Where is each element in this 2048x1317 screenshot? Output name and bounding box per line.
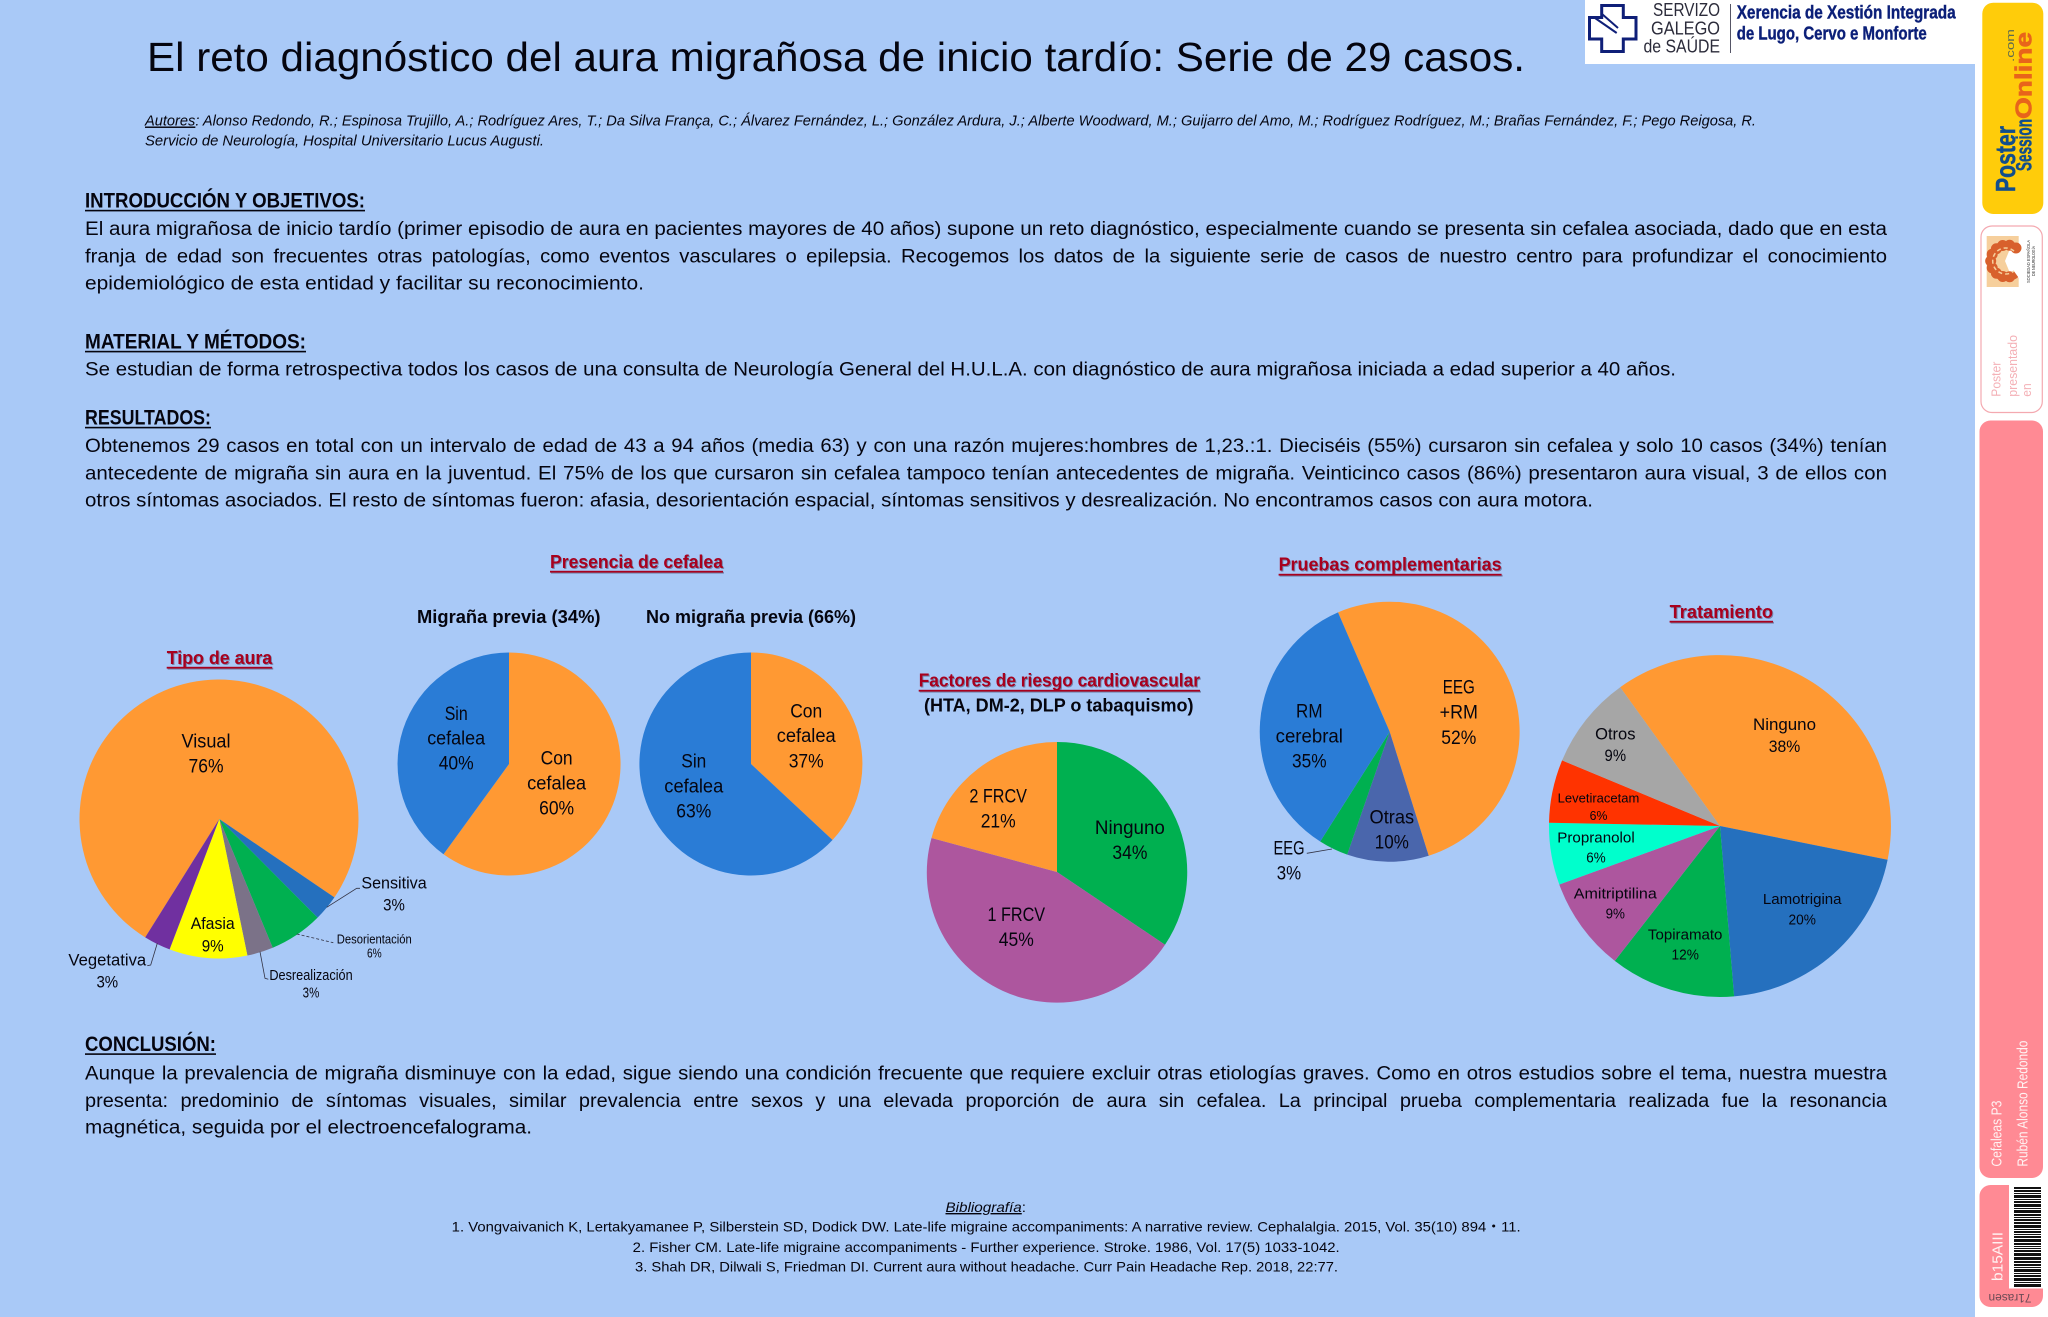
text block: magnética, seguida por el electroencefalograma. bbox=[85, 1118, 532, 1138]
organisation name: de Lugo, Cervo e Monforte bbox=[1737, 24, 1927, 44]
text block bbox=[85, 219, 1887, 294]
presented text: en bbox=[2019, 383, 2034, 397]
labels: 40% bbox=[439, 754, 474, 775]
labels: Afasia bbox=[191, 915, 235, 933]
labels: cerebral bbox=[1276, 727, 1343, 748]
panel: poster presentado en bbox=[1981, 226, 2042, 412]
labels: 60% bbox=[539, 798, 574, 819]
subheading: No migraña previa (66%) bbox=[646, 606, 856, 627]
labels: RM bbox=[1296, 702, 1323, 723]
labels: 2 FRCV bbox=[969, 786, 1027, 807]
labels: +RM bbox=[1440, 703, 1478, 724]
labels: Con bbox=[790, 701, 822, 722]
labels: 6% bbox=[367, 947, 382, 961]
organisation name: Xerencia de Xestión Integrada bbox=[1737, 2, 1957, 22]
labels: Ninguno bbox=[1753, 716, 1816, 734]
labels: 3% bbox=[303, 986, 319, 1002]
bibliography: 3. Shah DR, Dilwali S, Friedman DI. Current aura without headache. Curr Pain Headache Rep. 2018, 22:77. bbox=[635, 1259, 1338, 1275]
leader line bbox=[1307, 849, 1332, 853]
labels: 10% bbox=[1375, 832, 1409, 853]
text block: antecedente de migraña sin aura en la juventud. El 75% de los que cursaron sin cefalea tampoco tenían antecedentes de migraña. Veinticinco casos (86%) presentaron aura visual, 3 de ellos con bbox=[85, 464, 1887, 484]
chart heading: presencia de cefalea: Presencia de cefalea bbox=[550, 552, 724, 572]
panel: session tag: Cefaleas P3 bbox=[1989, 1101, 2006, 1167]
labels: Sin bbox=[445, 704, 468, 725]
labels: 3% bbox=[383, 897, 405, 915]
labels bbox=[427, 704, 587, 819]
pie bbox=[1260, 602, 1520, 862]
logo word Online: Online bbox=[2010, 32, 2036, 119]
logo: brain bbox=[1987, 236, 2019, 287]
labels: 38% bbox=[1769, 738, 1801, 756]
section: material y métodos bbox=[85, 330, 1676, 380]
logo wordmark bbox=[1644, 0, 1720, 56]
labels: 21% bbox=[981, 811, 1016, 832]
labels: Sin bbox=[681, 751, 706, 772]
labels: 35% bbox=[1292, 752, 1327, 773]
logo wordmark: de SAÚDE bbox=[1644, 36, 1720, 56]
labels: 20% bbox=[1788, 912, 1816, 928]
bibliography: Bibliografía : bbox=[946, 1199, 1026, 1215]
section: resultados bbox=[85, 406, 1887, 512]
icon: cross bbox=[1590, 6, 1636, 52]
logo word Session: Session bbox=[2012, 119, 2036, 171]
labels: 3% bbox=[96, 974, 118, 992]
logo suffix: .com bbox=[2005, 29, 2017, 62]
labels: cefalea bbox=[427, 728, 486, 749]
pie bbox=[639, 652, 862, 875]
chart: migraña previa bbox=[398, 606, 621, 876]
pie bbox=[398, 652, 621, 876]
chart: no migraña previa bbox=[639, 606, 862, 875]
labels: 63% bbox=[676, 801, 711, 822]
labels: Vegetativa bbox=[68, 952, 147, 970]
section: introducción y objetivos bbox=[85, 188, 1887, 294]
presented text: presentado bbox=[2005, 335, 2020, 397]
title: El reto diagnóstico del aura migrañosa de inicio tardío: Serie de 29 casos. bbox=[147, 34, 1525, 80]
icon: cross diagonal strokes bbox=[1595, 14, 1618, 33]
heading: RESULTADOS: bbox=[85, 406, 211, 430]
barcode id: b15AIII bbox=[1990, 1232, 2007, 1281]
text block: otros síntomas asociados. El resto de síntomas fueron: afasia, desorientación espacial, síntomas sensitivos y desrealización. No encontramos casos con aura motora. bbox=[85, 490, 1593, 512]
authors: Autores: Alonso Redondo, R.; Espinosa Trujillo, A.; Rodríguez Ares, T.; Da Silva França, C.; Álvarez Fernández, L.; González Ardura, J.; Alberte Woodward, M.; Guijarro del Amo, M.; Rodríguez Rodríguez, M.; Brañas Fernández, F.; Pego Reigosa, R. bbox=[144, 112, 1756, 130]
subheading: (HTA, DM-2, DLP o tabaquismo) bbox=[924, 695, 1194, 716]
bibliography: 2. Fisher CM. Late-life migraine accompaniments - Further experience. Stroke. 1986, Vol. 17(5) 1033-1042. bbox=[633, 1239, 1340, 1255]
logo: PosterSessionOnline bbox=[1982, 3, 2043, 214]
panel: session tag bbox=[1980, 420, 2043, 1178]
labels: Con bbox=[541, 748, 573, 769]
labels: 1 FRCV bbox=[988, 905, 1045, 926]
barcode code: 71rasen bbox=[1988, 1291, 2032, 1305]
labels: EEG bbox=[1274, 838, 1304, 859]
labels: 9% bbox=[202, 938, 224, 956]
labels: Amitriptilina bbox=[1574, 886, 1658, 902]
society caption bbox=[2025, 239, 2037, 283]
labels: 12% bbox=[1672, 947, 1699, 963]
barcode bbox=[2014, 1187, 2041, 1288]
labels: 9% bbox=[1605, 747, 1626, 765]
labels: 6% bbox=[1586, 850, 1606, 866]
labels: 76% bbox=[188, 757, 224, 778]
section: conclusión bbox=[85, 1032, 1887, 1138]
labels: Desorientación bbox=[337, 932, 412, 946]
labels: 37% bbox=[789, 751, 824, 772]
labels: 34% bbox=[1112, 843, 1147, 864]
labels: Sensitiva bbox=[361, 874, 427, 892]
chart heading: Tratamiento bbox=[1670, 602, 1773, 622]
labels bbox=[1557, 716, 1843, 963]
organisation name bbox=[1737, 2, 1957, 44]
labels: EEG bbox=[1443, 677, 1475, 698]
authors: Servicio de Neurología, Hospital Universitario Lucus Augusti. bbox=[145, 134, 544, 150]
labels: cefalea bbox=[527, 773, 587, 794]
labels: Otras bbox=[1370, 807, 1414, 828]
presented text bbox=[1989, 335, 2034, 397]
authors bbox=[144, 112, 1756, 150]
logo divider bbox=[1730, 4, 1731, 53]
labels bbox=[68, 731, 427, 1002]
bibliography: 1. Vongvaivanich K, Lertakyamanee P, Silberstein SD, Dodick DW. Late-life migraine accompaniments: A narrative review. Cephalalgia. 2015, Vol. 35(10) 894・11. bbox=[452, 1219, 1521, 1235]
labels: cefalea bbox=[664, 776, 724, 797]
chart: pruebas complementarias bbox=[1260, 555, 1520, 884]
text block: El aura migrañosa de inicio tardío (primer episodio de aura en pacientes mayores de 40 años) supone un reto diagnóstico, especialmente cuando se presenta sin cefalea asociada, dado que en esta bbox=[85, 219, 1887, 240]
text block: Se estudian de forma retrospectiva todos los casos de una consulta de Neurología General del H.U.L.A. con diagnóstico de aura migrañosa iniciada a edad superior a 40 años. bbox=[85, 360, 1676, 380]
pie bbox=[80, 680, 359, 958]
logo: Servizo Galego de Saúde header bbox=[1585, 0, 1975, 64]
text block: Aunque la prevalencia de migraña disminuye con la edad, sigue siendo una condición frecuente que requiere excluir otras etiologías graves. Como en otros estudios sobre el tema, nuestra muestra bbox=[85, 1064, 1887, 1084]
labels: Propranolol bbox=[1557, 831, 1635, 847]
labels: Ninguno bbox=[1095, 818, 1165, 839]
labels bbox=[1274, 677, 1478, 884]
labels: 45% bbox=[999, 930, 1034, 951]
chart: tipo de aura bbox=[68, 648, 427, 1002]
labels: Levetiracetam bbox=[1558, 791, 1639, 805]
labels: Desrealización bbox=[269, 968, 353, 984]
labels bbox=[664, 701, 836, 822]
chart: factores de riesgo cardiovascular bbox=[919, 671, 1200, 1003]
pie bbox=[1549, 655, 1891, 997]
text block: presenta: predominio de síntomas visuales, similar prevalencia entre sexos y una elevada proporción de aura sin cefalea. La principal prueba complementaria realizada fue la resonancia bbox=[85, 1091, 1887, 1112]
subheading: Migraña previa (34%) bbox=[417, 606, 600, 627]
text block: epidemiológico de esta entidad y facilitar su reconocimiento. bbox=[85, 274, 644, 294]
society caption: DE NEUROLOGÍA bbox=[2030, 245, 2037, 276]
chart heading: Pruebas complementarias bbox=[1279, 555, 1502, 575]
heading: MATERIAL Y MÉTODOS: bbox=[85, 330, 306, 354]
text block bbox=[85, 1064, 1887, 1138]
labels: Otros bbox=[1595, 725, 1636, 743]
labels: Visual bbox=[182, 731, 230, 752]
leader lines bbox=[147, 888, 360, 979]
pie bbox=[927, 742, 1187, 1003]
heading: CONCLUSIÓN: bbox=[85, 1032, 216, 1056]
labels: Lamotrigina bbox=[1763, 892, 1843, 908]
panel: session tag: Rubén Alonso Redondo bbox=[2015, 1041, 2032, 1167]
panel: barcode tag bbox=[1980, 1185, 2043, 1307]
chart heading: Tipo de aura bbox=[167, 648, 273, 668]
society caption: SOCIEDAD ESPAÑOLA bbox=[2025, 239, 2032, 283]
heading: INTRODUCCIÓN Y OBJETIVOS: bbox=[85, 188, 365, 212]
labels: 52% bbox=[1441, 728, 1476, 749]
labels: 6% bbox=[1590, 809, 1607, 823]
labels: 9% bbox=[1606, 906, 1625, 922]
chart heading: Factores de riesgo cardiovascular bbox=[919, 671, 1200, 691]
logo wordmark: GALEGO bbox=[1651, 18, 1720, 38]
bibliography bbox=[452, 1199, 1521, 1275]
text block: franja de edad son frecuentes otras patologías, como eventos vasculares o epilepsia. Recogemos los datos de la siguiente serie de casos de nuestro centro para profundizar el conocimiento bbox=[85, 246, 1887, 268]
presented text: Poster bbox=[1989, 361, 2004, 397]
logo wordmark: SERVIZO bbox=[1653, 0, 1720, 20]
chart: tratamiento bbox=[1549, 602, 1891, 997]
labels: Topiramato bbox=[1648, 927, 1722, 943]
panel: sidebar bbox=[1975, 0, 2048, 1317]
logo word Poster: Poster bbox=[1990, 126, 2021, 192]
labels: cefalea bbox=[777, 726, 836, 747]
labels bbox=[969, 786, 1165, 951]
text block: Obtenemos 29 casos en total con un intervalo de edad de 43 a 94 años (media 63) y con una razón mujeres:hombres de 1,23.:1. Dieciséis (55%) cursaron sin cefalea y solo 10 casos (34%) tenían bbox=[85, 436, 1887, 457]
labels: 3% bbox=[1277, 863, 1301, 884]
text block bbox=[85, 436, 1887, 512]
